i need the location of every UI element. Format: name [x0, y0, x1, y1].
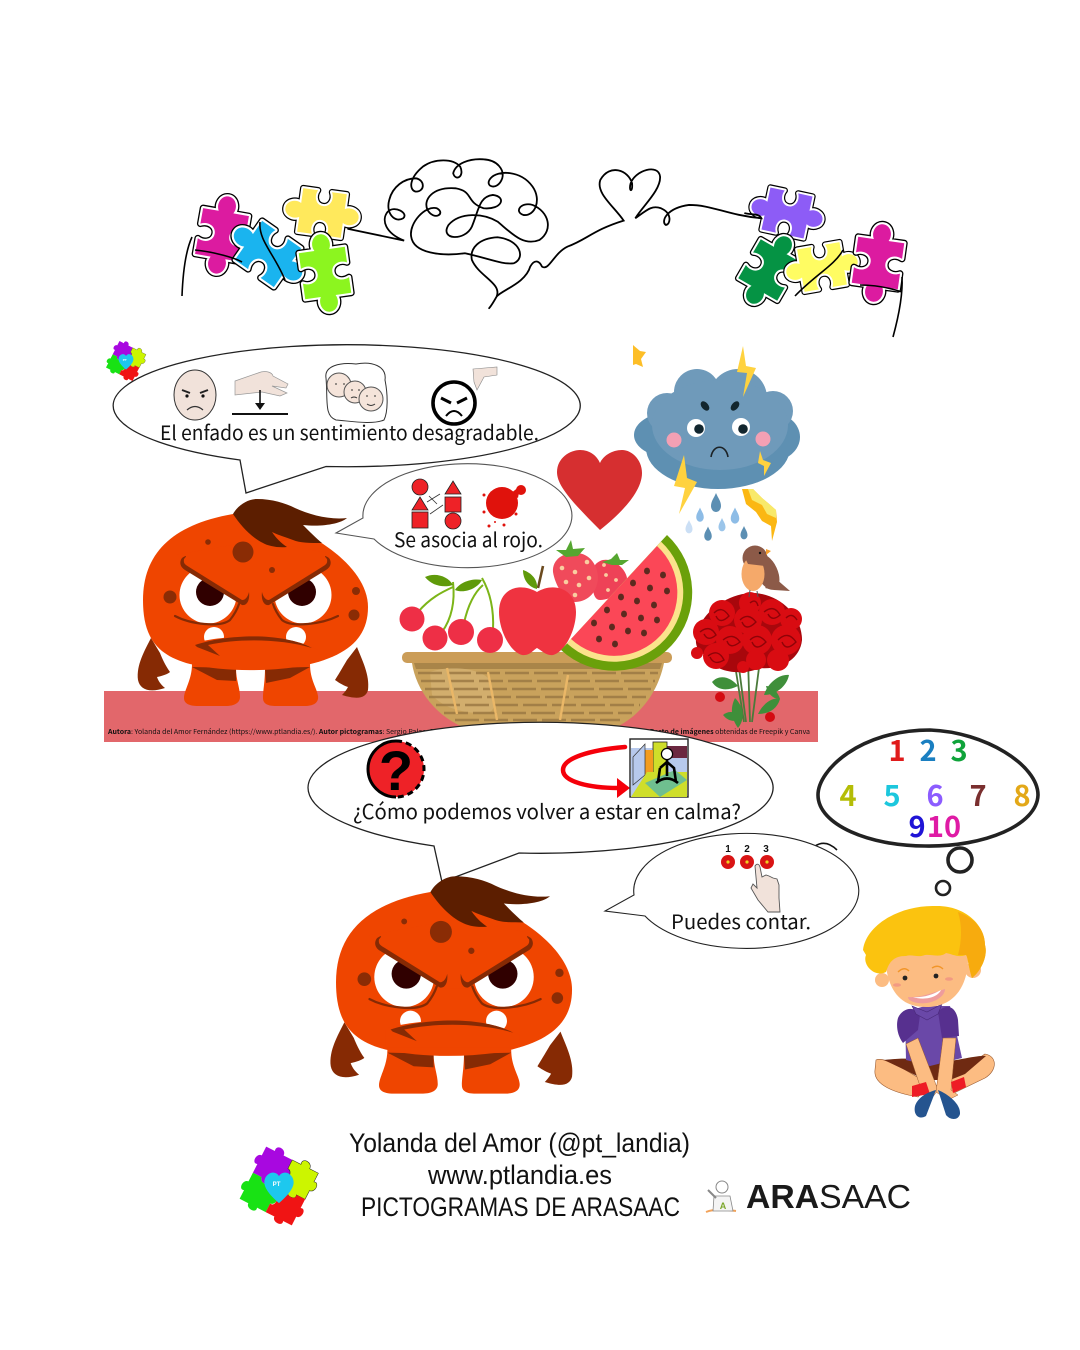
- lightning bolts: [674, 346, 777, 541]
- watermelon: [561, 535, 692, 671]
- header illustration: puzzles, brain and heart line: [182, 159, 906, 337]
- numbers: 6: [926, 773, 944, 815]
- boy counting: [863, 906, 994, 1119]
- numbers: 7: [969, 773, 987, 815]
- speech bubble: unpleasant feeling: [113, 345, 580, 493]
- pictogram: red shapes: [412, 479, 461, 529]
- author credits: www.ptlandia.es: [427, 1160, 612, 1190]
- numbers: 10: [927, 804, 961, 846]
- thought bubble with numbers: [818, 728, 1038, 895]
- strawberries: [553, 540, 629, 602]
- pictogram: question mark: ?: [379, 739, 413, 802]
- band: red ground with credits: [104, 691, 818, 742]
- icon: ARASAAC figure: A: [720, 1201, 727, 1211]
- footer logo: [233, 1140, 325, 1232]
- puzzle group left: [182, 186, 362, 315]
- bubble text: El enfado es un sentimiento desagradable.: [160, 417, 539, 446]
- bubble text: ¿Cómo podemos volver a estar en calma?: [353, 795, 741, 825]
- pictogram: disagreeable face with thumb down: [433, 367, 497, 424]
- author credits: Yolanda del Amor (@pt_landia): [349, 1128, 690, 1158]
- brain and heart line: [348, 159, 761, 308]
- storm cloud character: [633, 345, 800, 541]
- numbers: 9: [908, 804, 926, 846]
- ARASAAC logo: ARASAAC: [746, 1178, 911, 1215]
- rain drops: [686, 493, 748, 541]
- numbers: 1: [888, 728, 906, 770]
- fruit basket: [400, 535, 692, 730]
- basket: [402, 652, 672, 730]
- speech bubble: you can count: [605, 833, 859, 948]
- bubble text: Puedes contar.: [671, 906, 811, 935]
- cherries: [400, 575, 503, 653]
- pictogram: counting flowers: 3: [763, 844, 769, 855]
- numbers: 4: [839, 773, 857, 815]
- author credits: PICTOGRAMAS DE ARASAAC: [361, 1192, 680, 1222]
- angry monster, top: [138, 499, 368, 706]
- rose heads: [691, 592, 802, 673]
- angry monster, bottom: [330, 876, 572, 1094]
- pictogram: counting flowers: 1: [725, 844, 731, 855]
- pictogram: arrow back: [563, 747, 630, 798]
- numbers: 3: [950, 728, 968, 770]
- author credits: [349, 1128, 690, 1222]
- icon: ARASAAC figure: [706, 1181, 736, 1212]
- puzzle group right: [731, 184, 906, 337]
- numbers: 5: [883, 773, 901, 815]
- pictogram: several faces: [326, 363, 387, 422]
- numbers: [839, 728, 1031, 846]
- heart: [557, 450, 642, 530]
- pictogram: counting flowers: [721, 844, 774, 869]
- numbers: 2: [919, 728, 937, 770]
- speech bubble: associated with red: [336, 464, 572, 568]
- pictogram: angry face: [174, 370, 216, 420]
- stems and leaves: [712, 660, 789, 728]
- apple: [499, 566, 576, 655]
- small puzzle logo: [103, 337, 149, 384]
- pictogram: hand feeling down: [232, 372, 288, 414]
- credits line: Autora: Yolanda del Amor Fernández (https://www.ptlandia.es/). Autor pictogramas : Sergio Palao. Procedencia: ARASAAC (https://arasaac.org). Licencia: CC BY-NC-SA. Resto de imágenes obtenidas de Freepik y Canva: [107, 726, 810, 736]
- fallen petals: [715, 692, 775, 722]
- pictogram: pointing hand: [751, 864, 780, 912]
- roses bouquet with bird: [691, 546, 802, 728]
- bubble text: Se asocia al rojo.: [394, 524, 543, 553]
- speech bubble: how to calm down: [308, 722, 773, 882]
- star spark: [633, 345, 646, 367]
- pictogram: calm person in room: [630, 739, 688, 797]
- pictogram: counting flowers: 2: [744, 844, 750, 855]
- bird: [742, 546, 790, 597]
- pictogram: red splat: [482, 485, 526, 528]
- numbers: 8: [1013, 773, 1031, 815]
- pictogram: question mark: [368, 739, 424, 802]
